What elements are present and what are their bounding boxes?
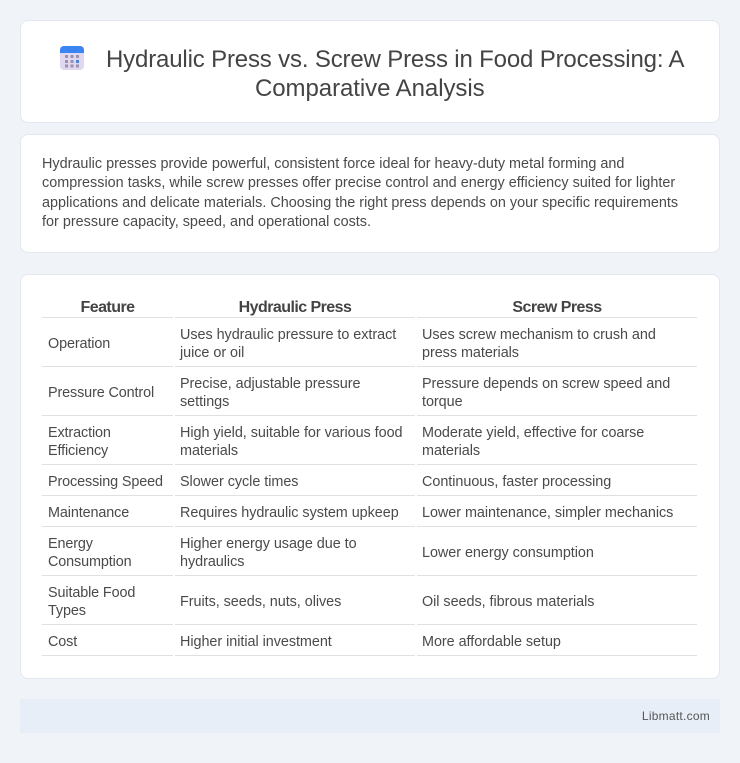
row: pressure control: settings (180, 394, 229, 410)
table header row: Hydraulic Press (239, 299, 351, 316)
row: operation: Operation (48, 336, 110, 352)
table header row (81, 299, 602, 316)
row: cost: More affordable setup (422, 634, 561, 650)
row: suitable food types: Oil seeds, fibrous materials (422, 594, 594, 610)
row: extraction efficiency: Extraction (48, 425, 111, 441)
table header row: Feature (81, 299, 134, 316)
row: cost: Cost (48, 634, 77, 650)
icon: calendar grid (60, 46, 84, 70)
row: energy consumption: hydraulics (180, 554, 244, 570)
intro text: compression tasks, while screw presses offer precise control and energy efficiency suited for lighter (42, 175, 675, 191)
row: pressure control: Pressure depends on screw speed and (422, 376, 670, 392)
title: Hydraulic Press vs. Screw Press in Food Processing: A (106, 46, 684, 73)
row: maintenance (42, 495, 697, 521)
intro text (42, 156, 678, 230)
panel: title card (20, 20, 720, 123)
row: processing speed: Continuous, faster processing (422, 474, 611, 490)
row: operation: juice or oil (180, 345, 244, 361)
row: suitable food types: Suitable Food (48, 585, 135, 601)
row: processing speed (42, 464, 697, 490)
row: extraction efficiency: materials (422, 443, 480, 459)
row: processing speed: Processing Speed (48, 474, 163, 490)
row: suitable food types: Fruits, seeds, nuts, olives (180, 594, 341, 610)
row: operation: Uses screw mechanism to crush and (422, 327, 656, 343)
row: energy consumption: Higher energy usage due to (180, 536, 357, 552)
row: extraction efficiency: Efficiency (48, 443, 108, 459)
row: pressure control: Pressure Control (48, 385, 154, 401)
intro text: applications and delicate materials. Choosing the right press depends on your specific requirements (42, 195, 678, 211)
row: maintenance: Maintenance (48, 505, 129, 521)
row: extraction efficiency (42, 415, 697, 459)
row: suitable food types: Types (48, 603, 86, 619)
row: energy consumption: Lower energy consumption (422, 545, 594, 561)
footer bar (20, 699, 720, 733)
row: maintenance: Lower maintenance, simpler mechanics (422, 505, 673, 521)
row: pressure control: Precise, adjustable pressure (180, 376, 360, 392)
row: maintenance: Requires hydraulic system upkeep (180, 505, 399, 521)
row: energy consumption: Consumption (48, 554, 131, 570)
title line 2: Comparative Analysis (255, 75, 485, 102)
intro text: for pressure capacity, speed, and operational costs. (42, 214, 371, 230)
footer text: Libmatt.com (642, 709, 710, 723)
panel: comparison table (20, 274, 720, 679)
row: extraction efficiency: Moderate yield, effective for coarse (422, 425, 644, 441)
panel: introduction (20, 134, 720, 253)
row: cost: Higher initial investment (180, 634, 332, 650)
row: pressure control (42, 366, 697, 410)
row: operation: press materials (422, 345, 519, 361)
row: operation (42, 317, 697, 361)
row: operation: Uses hydraulic pressure to extract (180, 327, 396, 343)
row: extraction efficiency: materials (180, 443, 238, 459)
row: extraction efficiency: High yield, suitable for various food (180, 425, 402, 441)
row: pressure control: torque (422, 394, 463, 410)
row: energy consumption (42, 526, 697, 570)
row: processing speed: Slower cycle times (180, 474, 298, 490)
row: energy consumption: Energy (48, 536, 93, 552)
table header row: Screw Press (512, 299, 602, 316)
intro text: Hydraulic presses provide powerful, consistent force ideal for heavy-duty metal forming and (42, 156, 624, 172)
